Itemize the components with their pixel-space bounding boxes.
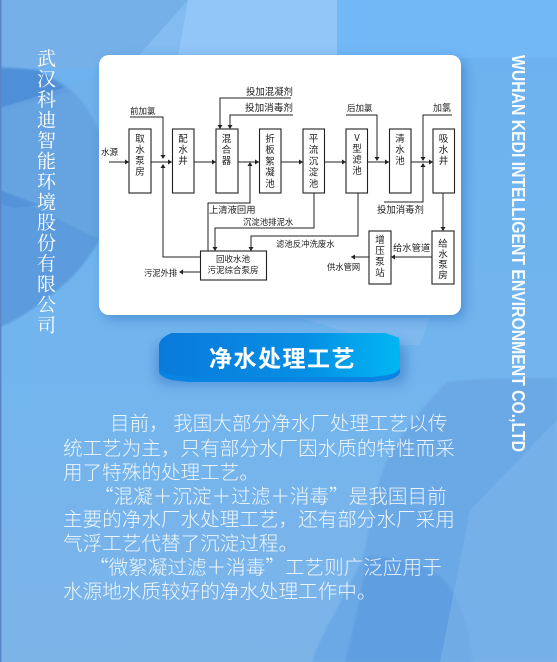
box labels: 凝 (265, 165, 275, 179)
box labels: 水 (395, 142, 405, 156)
flow annotations: 投加混凝剂 (246, 84, 293, 98)
arrowheads (125, 125, 446, 274)
box labels: 回收水池 (216, 253, 250, 265)
box labels: 池 (352, 163, 362, 177)
flow annotations: 后加氯 (347, 102, 373, 114)
box labels: 取 (135, 131, 145, 145)
box labels: 池 (265, 176, 275, 190)
box labels: 清 (395, 131, 405, 145)
box labels: 井 (178, 153, 188, 167)
left vertical company name: 公 (37, 290, 56, 317)
left vertical company name: 武 (37, 44, 56, 71)
body paragraphs: 主要的净水厂水处理工艺，还有部分水厂采用 (63, 503, 455, 532)
flow annotations: 沉淀池排泥水 (243, 216, 294, 228)
left vertical company name: 汉 (37, 64, 56, 92)
flow annotations: 滤池反冲洗废水 (276, 238, 335, 250)
process boxes (129, 129, 454, 284)
flow annotations: 投加消毒剂 (245, 100, 293, 114)
left vertical company name: 环 (37, 167, 57, 194)
box labels: 沉 (309, 153, 319, 167)
box labels: 水 (178, 142, 188, 156)
left vertical company name: 份 (37, 228, 56, 256)
box labels: 流 (309, 142, 319, 156)
box labels: 絮 (265, 153, 275, 167)
box labels: 滤 (352, 152, 362, 166)
body paragraphs: “微絮凝过滤＋消毒”工艺则广泛应用于 (89, 551, 442, 580)
box labels: 平 (309, 131, 319, 145)
diagram card (99, 55, 465, 319)
body paragraphs: 用了特殊的处理工艺。 (63, 456, 259, 485)
flow annotations: 水源 (101, 146, 119, 158)
box labels: 池 (309, 176, 319, 190)
left vertical company name: 迪 (37, 106, 56, 132)
connector lines (109, 98, 452, 272)
box labels: 池 (395, 153, 405, 167)
flow annotations: 加氯 (433, 101, 451, 114)
box labels: 型 (352, 141, 362, 155)
box labels: 房 (135, 164, 145, 178)
left vertical company name: 智 (37, 126, 56, 153)
box labels: 站 (375, 265, 385, 279)
box labels: 板 (265, 142, 275, 156)
flow annotations: 供水管网 (327, 261, 360, 273)
body paragraphs: 目前， 我国大部分净水厂处理工艺以传 (110, 407, 447, 436)
box labels: 泵 (375, 254, 385, 268)
left vertical company name: 有 (37, 249, 56, 276)
flow annotations (101, 84, 451, 279)
box labels: 器 (222, 153, 232, 167)
flow annotations: 上清液回用 (209, 202, 256, 216)
right vertical English company name: WUHAN KEDI INTELLIGENT ENVIRONMENT CO.,LTD (508, 55, 528, 452)
title banner (156, 333, 406, 384)
process flow diagram (101, 84, 454, 284)
body paragraphs: 水源地水质较好的净水处理工作中。 (63, 575, 376, 604)
box labels: 合 (222, 142, 232, 156)
left vertical company name: 能 (37, 146, 56, 174)
left vertical company name: 限 (37, 270, 56, 296)
flow annotations: 前加氯 (130, 105, 156, 117)
box labels: 折 (265, 131, 275, 145)
box labels: 泵 (135, 153, 145, 167)
box labels: 房 (438, 268, 448, 282)
body paragraphs: 气浮工艺代替了沉淀过程。 (63, 527, 298, 556)
box labels: 混 (222, 131, 232, 145)
box labels: 增 (375, 232, 385, 246)
box labels: V (354, 130, 360, 144)
left vertical company name: 股 (37, 208, 56, 235)
box labels: 水 (135, 142, 145, 156)
left vertical company name: 境 (37, 188, 56, 214)
flow annotations: 投加消毒剂 (377, 202, 424, 216)
body paragraphs: 统工艺为主，只有部分水厂因水质的特性而采 (63, 432, 455, 461)
flow annotations: 污泥外排 (144, 267, 177, 279)
box labels: 泵 (438, 257, 448, 271)
left vertical company name: 司 (37, 310, 56, 338)
body paragraphs: “混凝＋沉淀＋过滤＋消毒”是我国目前 (94, 480, 447, 509)
flow annotations: 给水管道 (393, 240, 430, 254)
body paragraphs (63, 407, 455, 604)
box labels: 水 (438, 246, 448, 260)
box labels: 污泥综合泵房 (207, 264, 259, 276)
title text: 净水处理工艺 (209, 340, 356, 374)
box labels (135, 130, 449, 282)
box labels: 压 (375, 243, 385, 257)
box labels: 配 (178, 131, 188, 145)
left vertical company name: 科 (37, 85, 56, 112)
box labels: 井 (439, 153, 448, 167)
box labels: 吸 (439, 131, 449, 145)
box labels: 给 (438, 236, 448, 250)
left vertical company name (37, 44, 57, 338)
box labels: 淀 (309, 165, 319, 179)
box labels: 水 (439, 142, 449, 156)
